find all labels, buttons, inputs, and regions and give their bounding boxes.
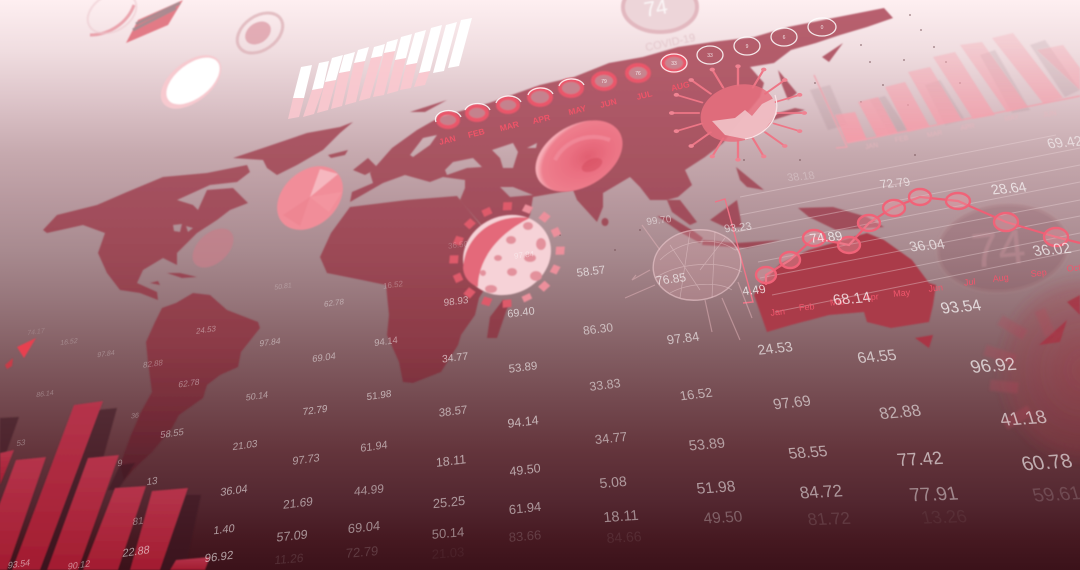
bars [0,401,210,570]
data number grid: 58.55 [160,427,184,441]
ring values: 76 [635,71,641,77]
ring values: 33 [707,53,713,59]
icon: striped diamond [126,0,183,43]
data number grid: 5.08 [599,473,628,491]
surface blobs [480,222,546,293]
data number grid: 16.52 [383,279,403,291]
New Guinea [798,207,884,230]
ring markers [438,55,685,127]
icon: white virus blob [151,45,231,119]
data number grid: 64.55 [855,347,899,367]
month labels: Jan [770,306,785,318]
Africa [320,196,500,383]
month labels: Feb [798,301,815,313]
data number grid: 98.93 [443,295,469,309]
pale sea overlap [712,98,777,139]
data number grid: 58.57 [576,264,606,280]
chart: pie [264,153,356,243]
data number grid: 82.88 [143,358,164,370]
United Kingdom [353,158,378,175]
data number grid: 97.84 [97,349,115,359]
data number grid: 69.04 [312,351,337,365]
data number grid: 62.78 [324,297,345,309]
data number grid: 24.53 [756,338,794,358]
month ring timeline [435,18,836,147]
virus body [694,76,782,150]
chart: pink bars, top right [810,33,1080,151]
axis labels [865,110,1057,151]
chart: red bars, bottom left [0,338,210,570]
white rim [745,95,777,139]
data number grid: 22.88 [122,544,150,560]
data number grid: 82.88 [877,401,923,423]
data number grid: 16.52 [60,337,78,347]
North America [43,165,250,300]
ring values: 0 [821,25,824,31]
legs [625,225,752,340]
data number grid: 36.04 [220,483,248,499]
data number grid: 96.92 [967,353,1019,377]
ring values [601,25,824,85]
data number grid: 94.14 [374,335,398,349]
month labels: FEB [467,126,486,140]
ring values: 33 [671,61,677,67]
data number grid: 96.92 [204,549,234,565]
data number grid: 77.42 [895,448,945,470]
data number grid: 33.83 [589,376,622,394]
South America [120,293,260,480]
month labels [438,79,691,147]
data number grid: 36 [131,411,139,421]
data number grid: 25.25 [433,493,465,511]
Tasmania [915,335,933,348]
data number grid: 13 [146,476,158,488]
scattered dots [559,14,961,251]
data number grid: 74.89 [808,228,844,246]
virus spike stems [672,66,804,160]
New Zealand [1039,295,1080,345]
icon: blood cell [523,106,635,206]
month labels: JUL [635,88,653,102]
Australia [754,233,936,332]
axis labels: MAY [1004,114,1020,123]
Sakhalin [822,43,843,62]
month labels: Jun [928,282,943,294]
month labels: MAR [499,119,520,133]
data number grid: 61.94 [360,439,388,455]
Svalbard [410,100,447,112]
axis labels: JAN [865,142,879,151]
data number grid: 49.50 [509,461,541,479]
data number grid: 93.23 [723,221,753,235]
data number grid: 24.53 [196,324,217,336]
data number grid: 38.18 [786,170,816,184]
data number grid: 84.66 [606,528,642,546]
body [649,224,745,306]
ring values: 6 [783,35,786,41]
month labels: APR [531,112,551,126]
shaded side [463,217,530,287]
data number grid: 1.40 [213,523,235,537]
data number grid: 50.14 [432,524,464,542]
data number grid: 60.78 [1019,451,1075,475]
data number grid: 28.64 [989,180,1029,198]
chart: line chart [715,135,1080,318]
bars [835,33,1080,143]
Malay Peninsula [667,200,697,225]
data number grid: 72.79 [302,404,328,418]
data number grid: 86.30 [582,320,614,338]
Eurasia [350,8,893,240]
data number grid: 21.03 [232,439,258,453]
icon: ring arc top left [80,0,144,42]
month labels: MAY [567,103,588,117]
data number grid: 51.98 [367,389,392,403]
data number grid: 21.03 [432,544,464,562]
data number grid: 99.70 [646,214,673,228]
data number grid: 61.94 [508,499,542,517]
month labels: AUG [670,79,691,93]
data number grid: 84.72 [798,482,844,502]
month labels: JAN [438,133,457,147]
data number grid: 77.91 [908,484,960,506]
chunky spikes, pale side [492,199,581,300]
bar shadows [810,40,1080,135]
icon: small ellipse [185,221,241,275]
data number grid: 21.69 [283,494,314,512]
axis [814,75,1080,148]
month labels: Jul [963,276,976,288]
data number grid: 81.72 [806,509,852,529]
icon: coronavirus over East Asia [672,66,804,160]
data number grid: 62.78 [178,376,200,390]
month labels: Sep [1030,267,1047,279]
axis line [715,199,753,303]
red triangle marker [17,338,36,358]
data number grid: 72.79 [346,543,378,561]
gauge: 74 top [623,0,697,54]
small red marker [5,358,13,369]
axis labels: JUN [1042,110,1057,119]
data number grid: 36.50 [448,239,469,251]
month labels [770,262,1080,318]
mesh [655,232,742,298]
data number grid: 51.98 [695,478,737,498]
Philippines [736,167,764,190]
data points [756,189,1068,283]
data number grid: 94.14 [507,413,539,431]
data number grid: 58.55 [787,443,829,463]
bar shadows [0,408,201,570]
data number grid: 53.89 [508,360,538,376]
gauge: 74 top: COVID-19 [644,32,696,54]
icon: pale microbe [625,224,752,340]
faint large virus, lower right [985,272,1080,468]
white upper bars [293,18,472,98]
data number grid: 68.14 [831,289,873,309]
Sumatra [657,216,703,243]
data number grid: 44.99 [354,481,384,499]
data number grid: 83.66 [508,527,542,545]
virus spike balls [672,66,804,160]
Sri Lanka [602,218,608,226]
data number grid: 50.81 [274,282,292,292]
data number grid: 53.89 [688,436,726,454]
data number grid: 53 [16,438,26,448]
data number grid: 9 [117,458,123,468]
data number grid: 18.11 [436,452,466,470]
axis labels: APR [960,123,975,132]
Java strip [702,240,781,248]
data number grid: 97.84 [514,249,535,261]
data number grid: 57.09 [276,527,308,545]
data number grid: 97.73 [292,452,320,468]
gauge: large 74 [933,197,1073,299]
data number grid: 50.14 [245,389,269,403]
chunky spikes, red side [433,199,548,323]
month labels: JUN [599,96,618,110]
ring values: 9 [746,44,749,50]
Cuba and Caribbean [150,273,197,285]
data number grid: 49.50 [702,509,744,527]
data number grid: 74.17 [27,327,45,337]
data number grid: 69.40 [507,305,535,321]
axis labels: FEB [894,135,909,144]
Madagascar [487,300,509,338]
data number grid: 72.79 [878,175,912,191]
Japan [764,70,805,123]
month labels: Aug [992,272,1009,284]
axis labels: MAR [926,130,943,139]
data number grid: 97.69 [771,393,813,413]
data line [766,197,1080,285]
data number grid: 36.04 [907,236,947,254]
data number grid: 41.18 [997,406,1049,430]
Borneo [710,200,742,228]
data number grid [7,134,1080,570]
data number grid: 76.85 [655,270,688,288]
Greenland [233,122,353,175]
chart: white bars, top centre [288,18,472,119]
data number grid: 13.26 [919,506,969,528]
body [450,201,564,309]
data number grid: 11.26 [274,551,304,567]
data number grid: 4.49 [741,282,767,298]
Iceland [328,150,348,158]
data number grid: 86.14 [36,389,54,399]
data number grid: 93.54 [938,297,984,317]
icon: coronavirus over East Africa [433,199,581,323]
month labels: Apr [864,291,879,303]
ring values: 79 [601,79,607,85]
pink lower bars [288,51,430,119]
data number grid: 81 [132,516,144,528]
data number grid: 18.11 [603,508,639,526]
data number grid: 34.77 [442,350,468,366]
month labels: May [893,287,911,299]
data number grid: 38.57 [439,404,467,420]
grid lines [735,135,1080,312]
world map [43,8,1080,480]
data number grid: 97.84 [665,329,701,347]
white ring outlines [435,18,836,122]
gauge: large 74: 74 [969,220,1028,279]
data number grid: 97.84 [259,335,281,349]
data number grid: 69.04 [348,518,380,536]
icon: target ring top [230,5,290,61]
data number grid: 16.52 [678,385,714,403]
data number grid: 34.77 [594,429,628,447]
data number grid: 36.02 [1031,240,1073,260]
month labels: Mar [829,296,846,308]
